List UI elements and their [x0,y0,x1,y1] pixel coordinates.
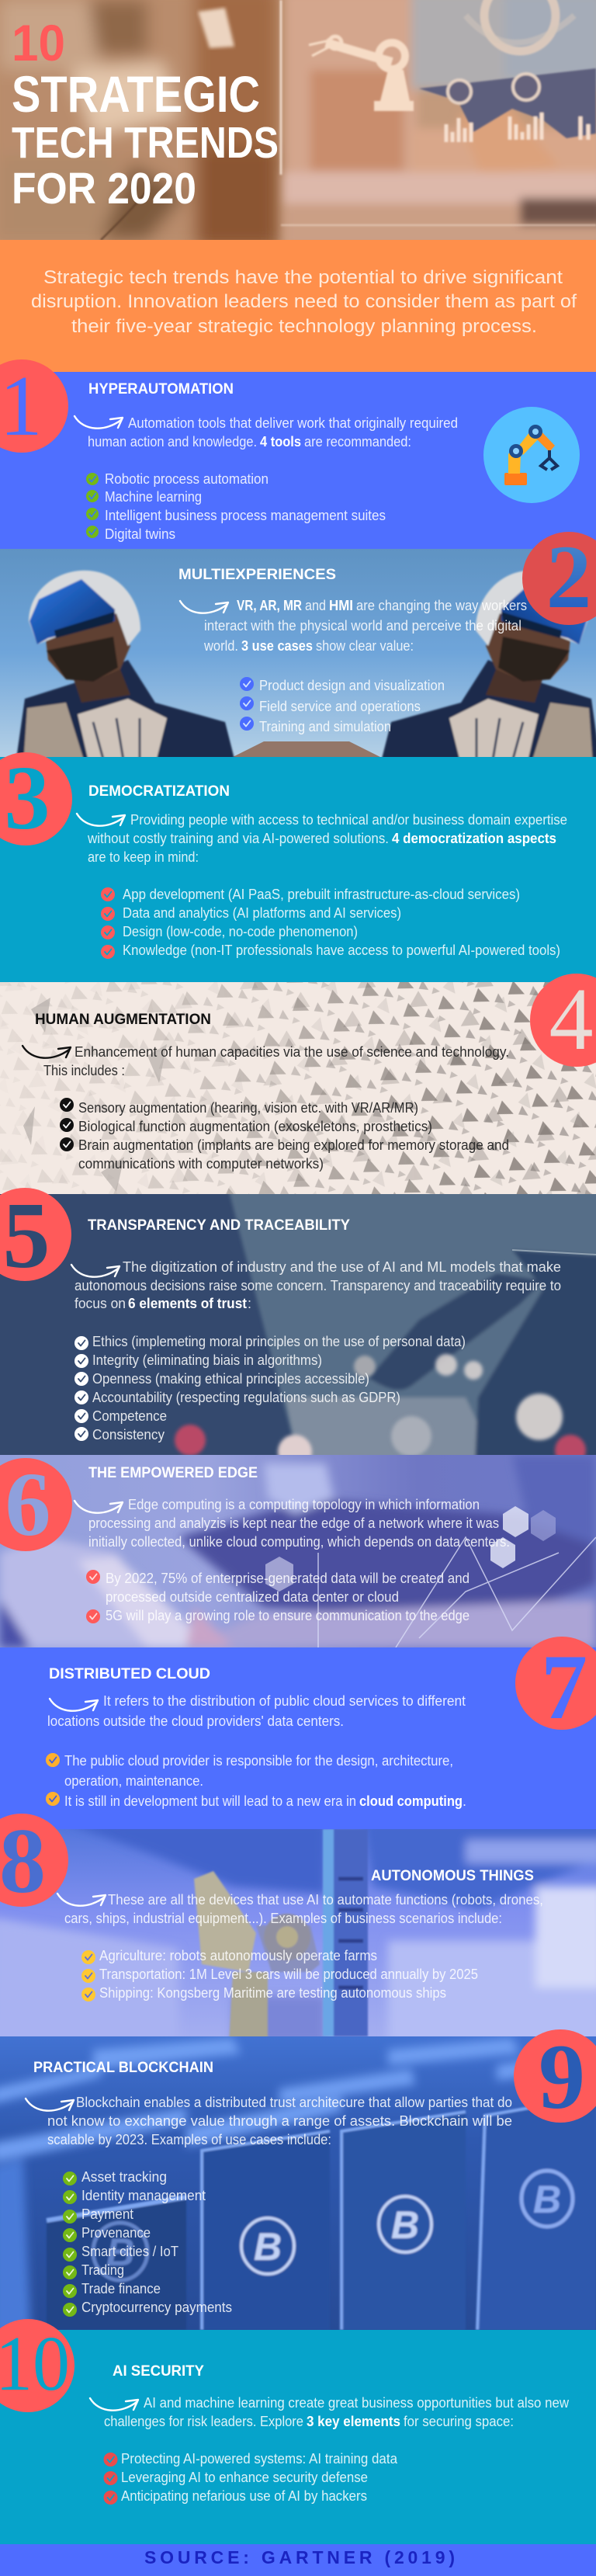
badge: number 6 [0,1453,72,1555]
description: are changing the way workers [356,598,527,613]
checklist: Cryptocurrency payments [81,2300,232,2315]
checklist: Anticipating nefarious use of AI by hackers [121,2488,367,2504]
panel: source footer [0,2544,596,2576]
checklist: Data and analytics (AI platforms and AI services) [123,905,401,921]
photo: bitcoin mining rigs [0,2036,596,2338]
checklist [46,1753,466,1809]
checklist: 5G will play a growing role to ensure communication to the edge [106,1608,470,1623]
panel: 10 ai security [0,2319,596,2544]
checklist: Digital twins [105,526,175,542]
description: 3 key elements [307,2414,400,2429]
description: show clear value: [316,638,414,654]
checklist: Intelligent business process management suites [105,508,386,523]
description [104,2395,570,2429]
panel: hero header [0,0,596,248]
arrow [57,1894,106,1906]
badge: number 7: 7 [541,1635,587,1738]
description: 4 democratization aspects [392,831,556,846]
panel: 4 human augmentation [0,970,596,1194]
checklist: Machine learning [105,489,202,505]
intro text: disruption. Innovation leaders need to consider them as part of [31,291,577,312]
badge: number 3 [0,747,72,849]
title: for 2020: FOR 2020 [12,164,196,214]
checklist [101,887,560,959]
checklist: Competence [92,1408,167,1424]
checklist: It is still in development but will lead to a new era in [64,1793,356,1809]
checklist: Biological function augmentation (exoskeletons, prosthetics) [78,1119,432,1134]
arrow [71,1265,120,1277]
description: Automation tools that deliver work that originally required [128,415,458,431]
intro text [31,267,577,337]
checklist: Trading [81,2262,124,2278]
arrow [23,1046,71,1058]
checklist: Robotic process automation [105,471,269,487]
description: 4 tools [260,434,301,450]
heading: THE EMPOWERED EDGE [88,1465,258,1481]
checklist: . [463,1793,466,1809]
description [43,1044,509,1078]
photo: bitcoin mining rigs: B [106,2231,134,2274]
description: These are all the devices that use AI to automate functions (robots, drones, [108,1892,543,1908]
title: tech trends: TECH TRENDS [12,118,279,168]
badge: number 4 [530,970,596,1068]
intro text: Strategic tech trends have the potential to drive significant [43,267,563,288]
description: world. [203,638,238,654]
checklist: The public cloud provider is responsible for the design, architecture, [64,1753,453,1769]
checklist: Leveraging AI to enhance security defense [121,2470,368,2485]
badge: number 1: 1 [0,359,43,454]
badge: number 5 [0,1183,71,1288]
heading: MULTIEXPERIENCES [178,567,336,583]
checklist: cloud computing [359,1793,463,1809]
arrow [77,814,125,826]
badge: number 5: 5 [3,1183,50,1288]
badge: number 9: 9 [539,2025,585,2128]
checklist: Design (low-code, no-code phenomenon) [123,924,358,939]
arrow [180,601,228,613]
intro text: their five-year strategic technology planning process. [71,316,537,337]
description: The digitization of industry and the use of AI and ML models that make [123,1259,561,1275]
description: cars, ships, industrial equipment...). Examples of business scenarios include: [64,1911,502,1926]
checklist: Ethics (implemeting moral principles on the use of personal data) [92,1334,466,1349]
checklist: Asset tracking [81,2169,167,2185]
description [47,2095,512,2147]
checklist [60,1098,509,1172]
heading: DISTRIBUTED CLOUD [49,1666,210,1682]
description [88,415,458,450]
arrow [50,1699,98,1711]
panel: 1 hyperautomation [0,359,596,549]
description: processing and analyzis is kept near the edge of a network where it was [88,1515,499,1531]
heading: AI SECURITY [113,2363,204,2380]
description: It refers to the distribution of public cloud services to different [103,1693,466,1709]
arrow [90,2398,138,2411]
photo: bitcoin mining rigs: B [391,2203,419,2247]
checklist: Training and simulation [259,719,391,734]
checklist: Consistency [92,1427,165,1442]
description: challenges for risk leaders. Explore [104,2414,303,2429]
checklist: Knowledge (non-IT professionals have access to powerful AI-powered tools) [123,943,560,958]
checklist: Identity management [81,2188,206,2203]
badge: number 6: 6 [5,1453,51,1555]
badge: number 3: 3 [5,747,50,849]
description: focus on [74,1296,126,1311]
checklist [74,1334,466,1442]
heading: PRACTICAL BLOCKCHAIN [33,2060,213,2076]
checklist [240,677,445,734]
description [64,1892,543,1926]
description: are recommanded: [304,434,411,450]
photo: triangle texture [0,982,596,1194]
panel: 7 distributed cloud [0,1635,596,1829]
panel: 2 multiexperiences [0,527,596,765]
checklist: operation, maintenance. [64,1773,203,1789]
checklist: Integrity (eliminating biais in algorithms) [92,1352,322,1368]
source text: SOURCE: GARTNER (2019) [144,2547,455,2567]
checklist: Smart cities / IoT [81,2244,178,2259]
panel: 6 the empowered edge [0,1453,596,1647]
description: autonomous decisions raise some concern. Transparency and traceability require to [74,1278,561,1293]
description: AI and machine learning create great business opportunities but also new [144,2395,570,2411]
description: Enhancement of human capacities via the use of science and technology. [74,1044,509,1060]
badge: number 7 [515,1635,596,1738]
badge: number 2: 2 [546,527,591,627]
checklist: Openness (making ethical principles accessible) [92,1371,369,1387]
description: Providing people with access to technical and/or business domain expertise [130,812,567,828]
description: interact with the physical world and perceive the digital [204,618,522,634]
checklist: Field service and operations [259,699,421,714]
checklist: Protecting AI-powered systems: AI training data [121,2451,398,2467]
photo: hand on phone [0,1188,596,1469]
photo: bitcoin mining rigs: B [254,2225,282,2269]
checklist: Transportation: 1M Level 3 cars will be produced annually by 2025 [99,1967,478,1982]
description: and [305,598,326,613]
panel: 9 practical blockchain [0,2025,596,2338]
checklist: Shipping: Kongsberg Maritime are testing autonomous ships [99,1985,446,2001]
description: for securing space: [404,2414,514,2429]
badge: number 9 [514,2025,596,2128]
description [88,1497,510,1550]
panel: intro band [0,240,596,372]
checklist: Trade finance [81,2281,161,2297]
description: scalable by 2023. Examples of use cases include: [47,2132,331,2147]
heading: HUMAN AUGMENTATION [35,1012,211,1028]
heading: DEMOCRATIZATION [88,783,230,800]
heading: AUTONOMOUS THINGS [371,1868,534,1884]
arrow [74,416,123,429]
icon: robot arm [483,407,580,503]
title: 10: 10 [12,14,65,71]
checklist [86,471,386,542]
checklist: App development (AI PaaS, prebuilt infrastructure-as-cloud services) [123,887,520,902]
checklist: Brain augmentation (implants are being explored for memory storage and [78,1137,509,1153]
arrow [26,2099,74,2111]
photo: laptop and network [0,1455,596,1647]
panel: 8 autonomous things [0,1809,596,2044]
badge: number 4: 4 [549,970,593,1068]
checklist [86,1570,470,1623]
checklist [63,2169,232,2317]
checklist: Product design and visualization [259,678,445,693]
panel: 3 democratization [0,747,596,982]
description: This includes : [43,1063,125,1078]
description: VR, AR, MR [237,598,302,613]
badge: number 8 [0,1809,68,1912]
description [47,1693,466,1729]
panel: 5 transparency and traceability [0,1183,596,1469]
description: initially collected, unlike cloud computing, which depends on data centers. [88,1534,510,1550]
badge: number 8: 8 [0,1809,46,1912]
description: are to keep in mind: [88,849,199,865]
description [87,812,567,865]
checklist: Provenance [81,2225,151,2241]
description: without costly training and via AI-powered solutions. [87,831,389,846]
description [203,598,527,654]
photo: factory robot [0,1821,596,2044]
hero background photo [0,0,596,248]
checklist: Agriculture: robots autonomously operate farms [99,1948,377,1963]
description: human action and knowledge. [88,434,257,450]
checklist: processed outside centralized data center or cloud [106,1589,399,1605]
description: Blockchain enables a distributed trust architecure that allow parties that do [76,2095,512,2110]
arrow [74,1501,123,1513]
description: locations outside the cloud providers' data centers. [47,1713,344,1729]
heading: HYPERAUTOMATION [88,381,234,398]
description: Edge computing is a computing topology in which information [128,1497,480,1512]
heading: TRANSPARENCY AND TRACEABILITY [88,1217,350,1234]
description [74,1259,561,1311]
badge: number 2 [522,527,596,627]
description: : [248,1296,251,1311]
checklist: Payment [81,2206,133,2222]
checklist [81,1948,478,2001]
checklist: Accountability (respecting regulations such as GDPR) [92,1390,400,1405]
photo: bitcoin mining rigs: B [533,2178,561,2221]
checklist: By 2022, 75% of enterprise-generated data will be created and [106,1571,470,1586]
photo: men with AR helmets [0,549,596,765]
badge: number 1 [0,359,68,454]
description: not know to exchange value through a range of assets. Blockchain will be [47,2113,512,2129]
checklist: Sensory augmentation (hearing, vision etc. with VR/AR/MR) [78,1100,418,1116]
checklist [104,2451,398,2505]
description: 6 elements of trust [128,1296,247,1311]
title: strategic: STRATEGIC [12,65,260,123]
checklist: communications with computer networks) [78,1156,324,1172]
description: HMI [329,598,353,613]
description: 3 use cases [241,638,313,654]
